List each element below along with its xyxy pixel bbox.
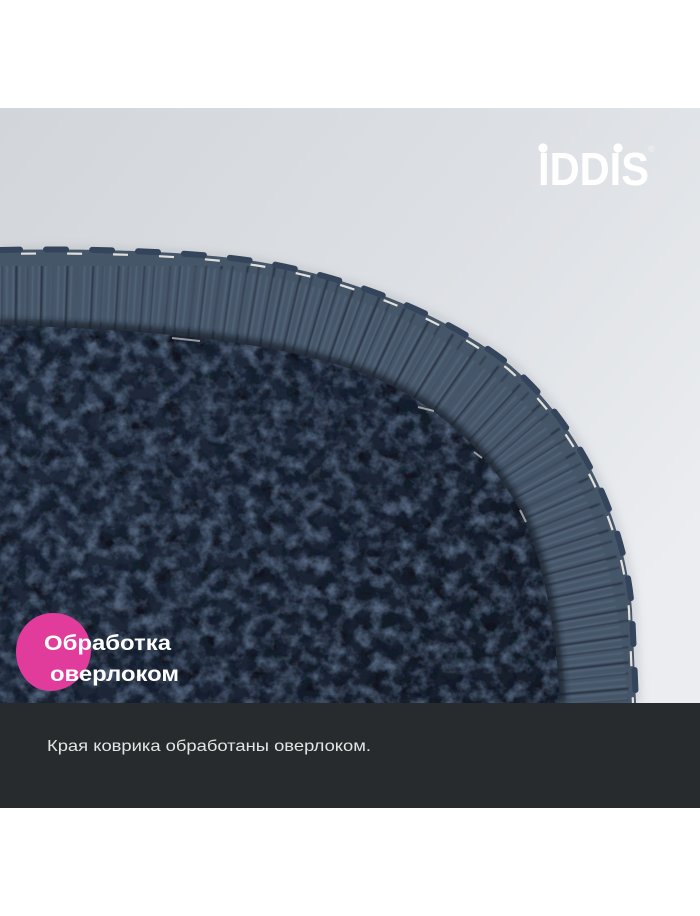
badge: pink blob with heading	[16, 613, 179, 691]
pink blob	[16, 613, 91, 691]
photo: rug corner with overlocked edge	[0, 108, 700, 720]
rug shadow	[0, 246, 642, 703]
caption text: Края коврика обработаны оверлоком.	[47, 738, 371, 755]
heading: Обработка	[44, 632, 171, 655]
photo backdrop	[0, 108, 700, 703]
heading: оверлоком	[50, 663, 179, 686]
logo: iddis: IDDIS	[538, 143, 649, 195]
edge beads	[0, 250, 636, 703]
edge stitching	[0, 254, 633, 703]
infographic canvas	[0, 108, 700, 808]
caption band	[0, 703, 700, 808]
logo: iddis: ®	[648, 144, 655, 154]
dark seam beside pile	[0, 325, 560, 703]
inner seam stitching	[172, 338, 526, 522]
overlock border band	[0, 250, 636, 720]
shag pile	[0, 325, 560, 703]
